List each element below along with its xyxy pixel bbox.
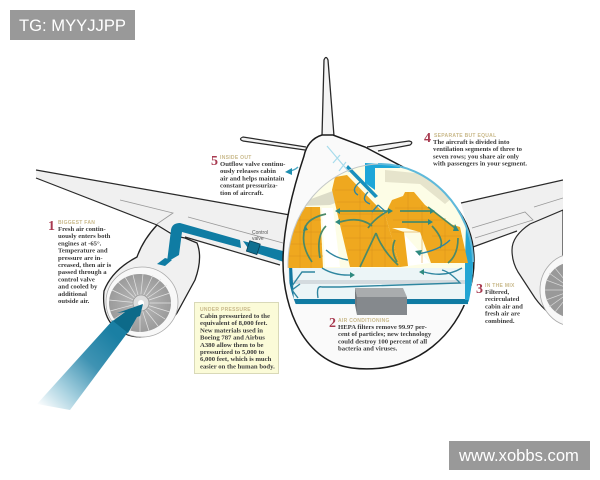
callout 1: biggest fan bbox=[48, 219, 112, 305]
callout 2: air conditioning: 2 bbox=[329, 316, 336, 331]
ceiling duct bbox=[365, 163, 400, 190]
callout 3: in the mix: combined. bbox=[485, 318, 515, 325]
left engine nacelle bbox=[104, 225, 200, 337]
callout: under pressure: New materials used in bbox=[200, 327, 263, 334]
cabin interior bbox=[286, 146, 476, 306]
callout 3: in the mix: fresh air are bbox=[485, 311, 520, 318]
tail fin bbox=[322, 58, 334, 136]
control valve: valve bbox=[252, 236, 264, 242]
callout 3: in the mix: IN THE MIX bbox=[485, 283, 515, 289]
callout: under pressure: easier on the human body. bbox=[200, 363, 275, 370]
callout 1: biggest fan: engines at -65°. bbox=[58, 240, 102, 247]
callout 1: biggest fan: 1 bbox=[48, 219, 55, 234]
callout: under pressure: 6,000 feet, which is much bbox=[200, 356, 272, 363]
callout 5: inside out: 5 bbox=[211, 154, 218, 169]
callout 4: separate but equal: SEPARATE BUT EQUAL bbox=[434, 133, 496, 139]
callout 1: biggest fan: control valve bbox=[58, 276, 95, 283]
airflow arrows bbox=[305, 214, 326, 258]
watermark: bottom right bbox=[449, 441, 590, 470]
callout 5: inside out: air and helps maintain bbox=[220, 175, 285, 182]
control valve bbox=[246, 230, 268, 255]
watermark: bottom right: www.xobbs.com bbox=[458, 446, 579, 465]
control valve: Control bbox=[252, 230, 268, 236]
callout 1: biggest fan: creased, then air is bbox=[58, 262, 112, 269]
callout 1: biggest fan: Fresh air contin- bbox=[58, 226, 106, 233]
seat rows bbox=[287, 207, 323, 268]
callout 3: in the mix: recirculated bbox=[485, 296, 520, 303]
callout: under pressure: equivalent of 8,000 feet. bbox=[200, 320, 268, 327]
ceiling diffusers bbox=[354, 182, 386, 212]
bleed air duct bbox=[157, 223, 287, 266]
callout 1: biggest fan: BIGGEST FAN bbox=[58, 220, 95, 226]
callout: under pressure: Cabin pressurized to the bbox=[200, 313, 270, 320]
callout 5: inside out: ously releases cabin bbox=[220, 168, 276, 175]
callout 5: inside out: constant pressuriza- bbox=[220, 183, 278, 190]
overhead bins bbox=[306, 191, 335, 206]
aisle shading bbox=[322, 208, 430, 267]
callout 5: inside out: Outflow valve continu- bbox=[220, 161, 285, 168]
engine fan bbox=[109, 274, 171, 332]
callout: under pressure: UNDER PRESSURE bbox=[200, 307, 251, 313]
callout 4: separate but equal bbox=[424, 131, 527, 168]
callout 4: separate but equal: seven rows; you share air only bbox=[433, 153, 520, 160]
outflow arrow bbox=[285, 167, 298, 175]
intake air beam bbox=[37, 304, 143, 410]
wall air ducts bbox=[293, 299, 468, 304]
fuselage cross-section bbox=[283, 135, 474, 369]
callout: under pressure: Boeing 787 and Airbus bbox=[200, 335, 265, 342]
callout 2: air conditioning: cent of particles; new technology bbox=[338, 331, 432, 338]
callout 4: separate but equal: 4 bbox=[424, 131, 431, 146]
callout 1: biggest fan: pressure are in- bbox=[58, 255, 103, 262]
callout 2: air conditioning: HEPA filters remove 99.97 per- bbox=[338, 324, 427, 331]
watermark: top left: TG: MYYJJPP bbox=[19, 16, 126, 35]
callout 1: biggest fan: Temperature and bbox=[58, 248, 108, 255]
callout: under pressure: A380 allow them to be bbox=[200, 342, 264, 349]
callout 1: biggest fan: passed through a bbox=[58, 269, 107, 276]
left wing bbox=[36, 170, 290, 265]
callout 2: air conditioning bbox=[329, 316, 432, 353]
callout: under pressure: pressurized to 5,000 to bbox=[200, 349, 265, 356]
callout 3: in the mix bbox=[476, 282, 523, 325]
callout 5: inside out: tion of aircraft. bbox=[220, 190, 264, 197]
callout 4: separate but equal: ventilation segments of three to bbox=[433, 146, 523, 153]
tailplane stabilizers bbox=[240, 137, 412, 151]
callout 5: inside out bbox=[211, 154, 285, 197]
air conditioning unit bbox=[297, 288, 468, 315]
callout: under pressure bbox=[194, 302, 278, 374]
callout 3: in the mix: cabin air and bbox=[485, 303, 523, 310]
callout 3: in the mix: Filtered, bbox=[485, 289, 510, 296]
callout 4: separate but equal: with passengers in your segment. bbox=[433, 161, 527, 168]
callout 5: inside out: INSIDE OUT bbox=[220, 155, 252, 161]
callout 4: separate but equal: The aircraft is divided into bbox=[433, 139, 510, 146]
callout 2: air conditioning: could destroy 100 percent of all bbox=[338, 338, 427, 345]
callout 1: biggest fan: and cooled by bbox=[58, 284, 98, 291]
callout 3: in the mix: 3 bbox=[476, 282, 483, 297]
callout 1: biggest fan: outside air. bbox=[58, 298, 90, 305]
callout 1: biggest fan: additional bbox=[58, 291, 87, 298]
callout 2: air conditioning: AIR CONDITIONING bbox=[338, 318, 390, 324]
right wing and engine bbox=[460, 179, 563, 325]
arrow heads bbox=[303, 208, 459, 278]
callout 2: air conditioning: bacteria and viruses. bbox=[338, 346, 398, 353]
callout 1: biggest fan: uously enters both bbox=[58, 233, 111, 240]
floor and cargo area bbox=[286, 268, 476, 306]
watermark: top left bbox=[10, 10, 135, 40]
